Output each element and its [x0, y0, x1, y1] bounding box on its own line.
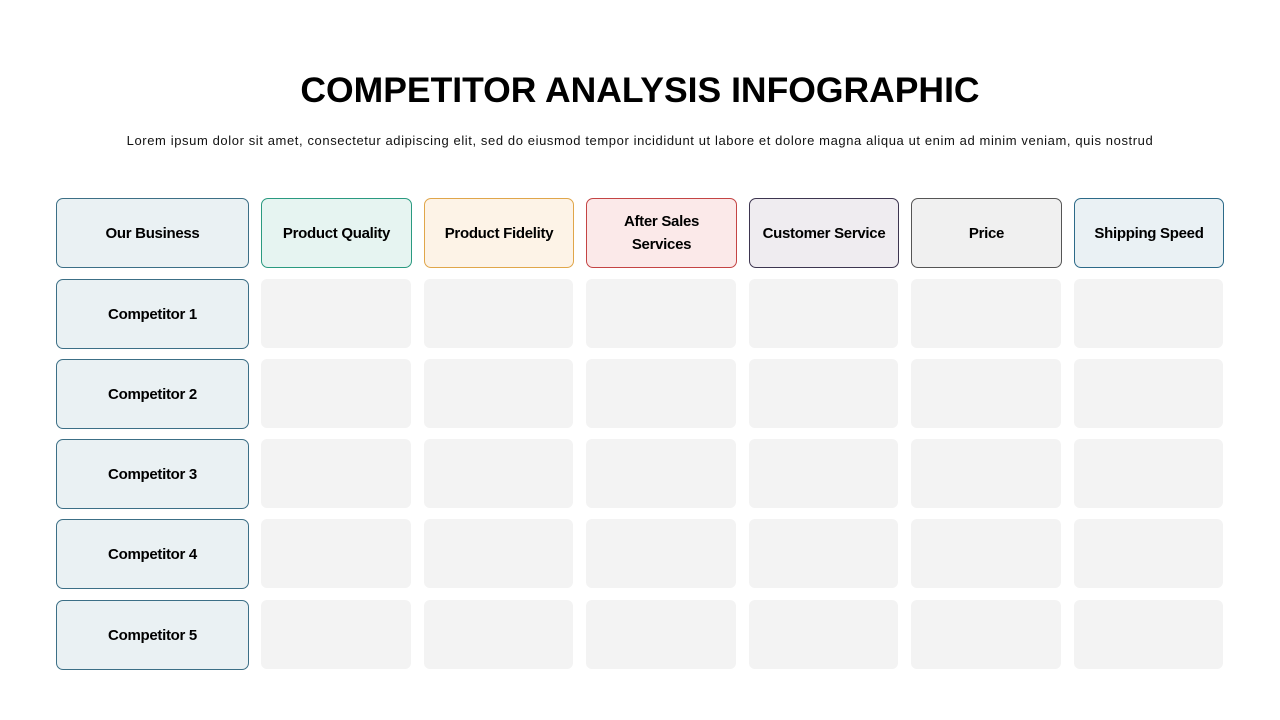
label: competitor 1	[56, 279, 249, 349]
header: our business: Our Business	[106, 224, 199, 242]
title: COMPETITOR ANALYSIS INFOGRAPHIC	[300, 70, 980, 110]
header: after sales	[586, 198, 737, 268]
header: product quality	[261, 198, 412, 268]
header: product quality: Product Quality	[283, 224, 390, 242]
header: product fidelity: Product Fidelity	[445, 224, 553, 242]
label: competitor 2: Competitor 2	[108, 386, 197, 402]
header: shipping speed: Shipping Speed	[1094, 224, 1204, 242]
label: competitor 3: Competitor 3	[108, 466, 197, 482]
header: after sales: After Sales	[624, 213, 699, 230]
label: competitor 1: Competitor 1	[108, 306, 197, 322]
header: shipping speed	[1074, 198, 1224, 268]
header: customer service	[749, 198, 899, 268]
header: price: Price	[969, 224, 1004, 242]
header: after sales: Services	[632, 236, 691, 253]
label: competitor 2	[56, 359, 249, 429]
header: price	[911, 198, 1062, 268]
header: customer service: Customer Service	[763, 224, 885, 242]
label: competitor 3	[56, 439, 249, 509]
header: product fidelity	[424, 198, 574, 268]
label: competitor 4: Competitor 4	[108, 546, 197, 562]
subtitle: Lorem ipsum dolor sit amet, consectetur adipiscing elit, sed do eiusmod tempor incididunt ut labore et dolore magna aliqua ut enim ad minim veniam, quis nostrud	[127, 133, 1153, 148]
label: competitor 5	[56, 600, 249, 670]
label: competitor 4	[56, 519, 249, 589]
label: competitor 5: Competitor 5	[108, 626, 197, 644]
header: our business	[56, 198, 249, 268]
